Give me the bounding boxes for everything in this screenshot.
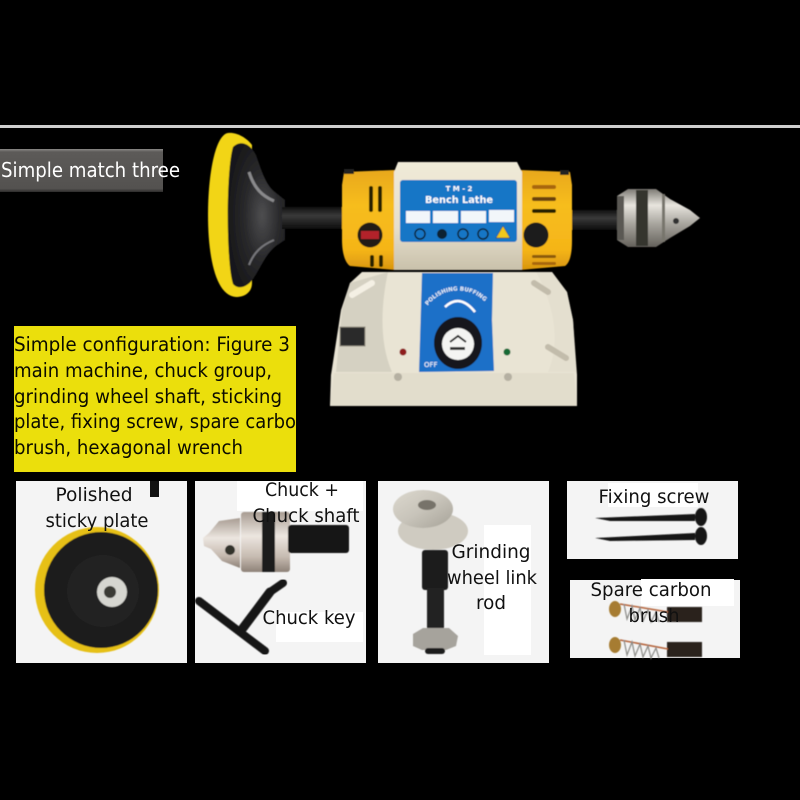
top divider line — [0, 125, 800, 128]
icon: chuck key — [199, 583, 283, 651]
panel: fixing screw — [567, 481, 738, 559]
speed knob — [434, 317, 482, 369]
panel: spare carbon brush: Spare carbon — [590, 579, 712, 601]
heading tag: Simple match three: Simple match three — [1, 158, 180, 182]
motor housing — [342, 162, 572, 270]
panel: grinding wheel link rod — [378, 481, 549, 663]
blue control panel: POLISHING BUFFING — [424, 286, 488, 306]
product photo: bench lathe — [207, 132, 700, 407]
panel: chuck and chuck key — [195, 479, 366, 663]
icon: screws — [595, 508, 707, 545]
panel: polished sticky plate — [16, 481, 187, 663]
icon: carbon brushes — [609, 601, 702, 658]
left display — [358, 222, 382, 248]
panel: spare carbon brush — [570, 579, 740, 658]
callout: simple configuration: brush, hexagonal wrench — [14, 436, 243, 459]
polishing plate with yellow rim — [208, 133, 285, 297]
blue motor label: T M - 2 — [446, 185, 473, 193]
vents — [369, 186, 373, 212]
machine base — [330, 272, 577, 406]
blue motor label: Bench Lathe — [425, 195, 493, 206]
callout: simple configuration — [14, 326, 296, 472]
panel: spare carbon brush: brush — [628, 605, 680, 627]
blue control panel: OFF — [424, 361, 438, 369]
right shaft — [572, 210, 618, 230]
panel: fixing screw: Fixing screw — [598, 486, 710, 508]
callout: simple configuration: grinding wheel shaft, sticking — [14, 385, 282, 408]
callout: simple configuration: main machine, chuck group, — [14, 359, 272, 382]
panel: chuck and chuck key: Chuck shaft — [252, 505, 360, 527]
icon: link rod — [413, 550, 458, 654]
panel: grinding wheel link rod: wheel link — [447, 567, 537, 589]
rocker switch — [340, 327, 365, 346]
panel: grinding wheel link rod: Grinding — [452, 541, 530, 563]
panel: grinding wheel link rod: rod — [476, 592, 506, 614]
callout: simple configuration: Simple configuration: Figure 3 — [14, 333, 290, 356]
drill chuck — [617, 189, 700, 247]
panel: polished sticky plate: Polished — [56, 484, 132, 506]
icon: chuck with shaft — [203, 512, 349, 572]
right switch — [524, 222, 548, 248]
blue motor label — [400, 180, 517, 242]
indicator lights — [400, 348, 406, 356]
blue control panel — [418, 272, 495, 373]
left shaft — [282, 207, 342, 229]
icon: grinding flanges — [393, 490, 468, 550]
panel: chuck and chuck key: Chuck + — [265, 479, 339, 501]
panel: polished sticky plate: sticky plate — [46, 510, 148, 532]
panel: chuck and chuck key: Chuck key — [262, 607, 356, 629]
icon: sticky plate — [35, 527, 159, 653]
callout: simple configuration: plate, fixing screw, spare carbo — [14, 410, 296, 433]
heading tag: Simple match three — [0, 149, 180, 192]
